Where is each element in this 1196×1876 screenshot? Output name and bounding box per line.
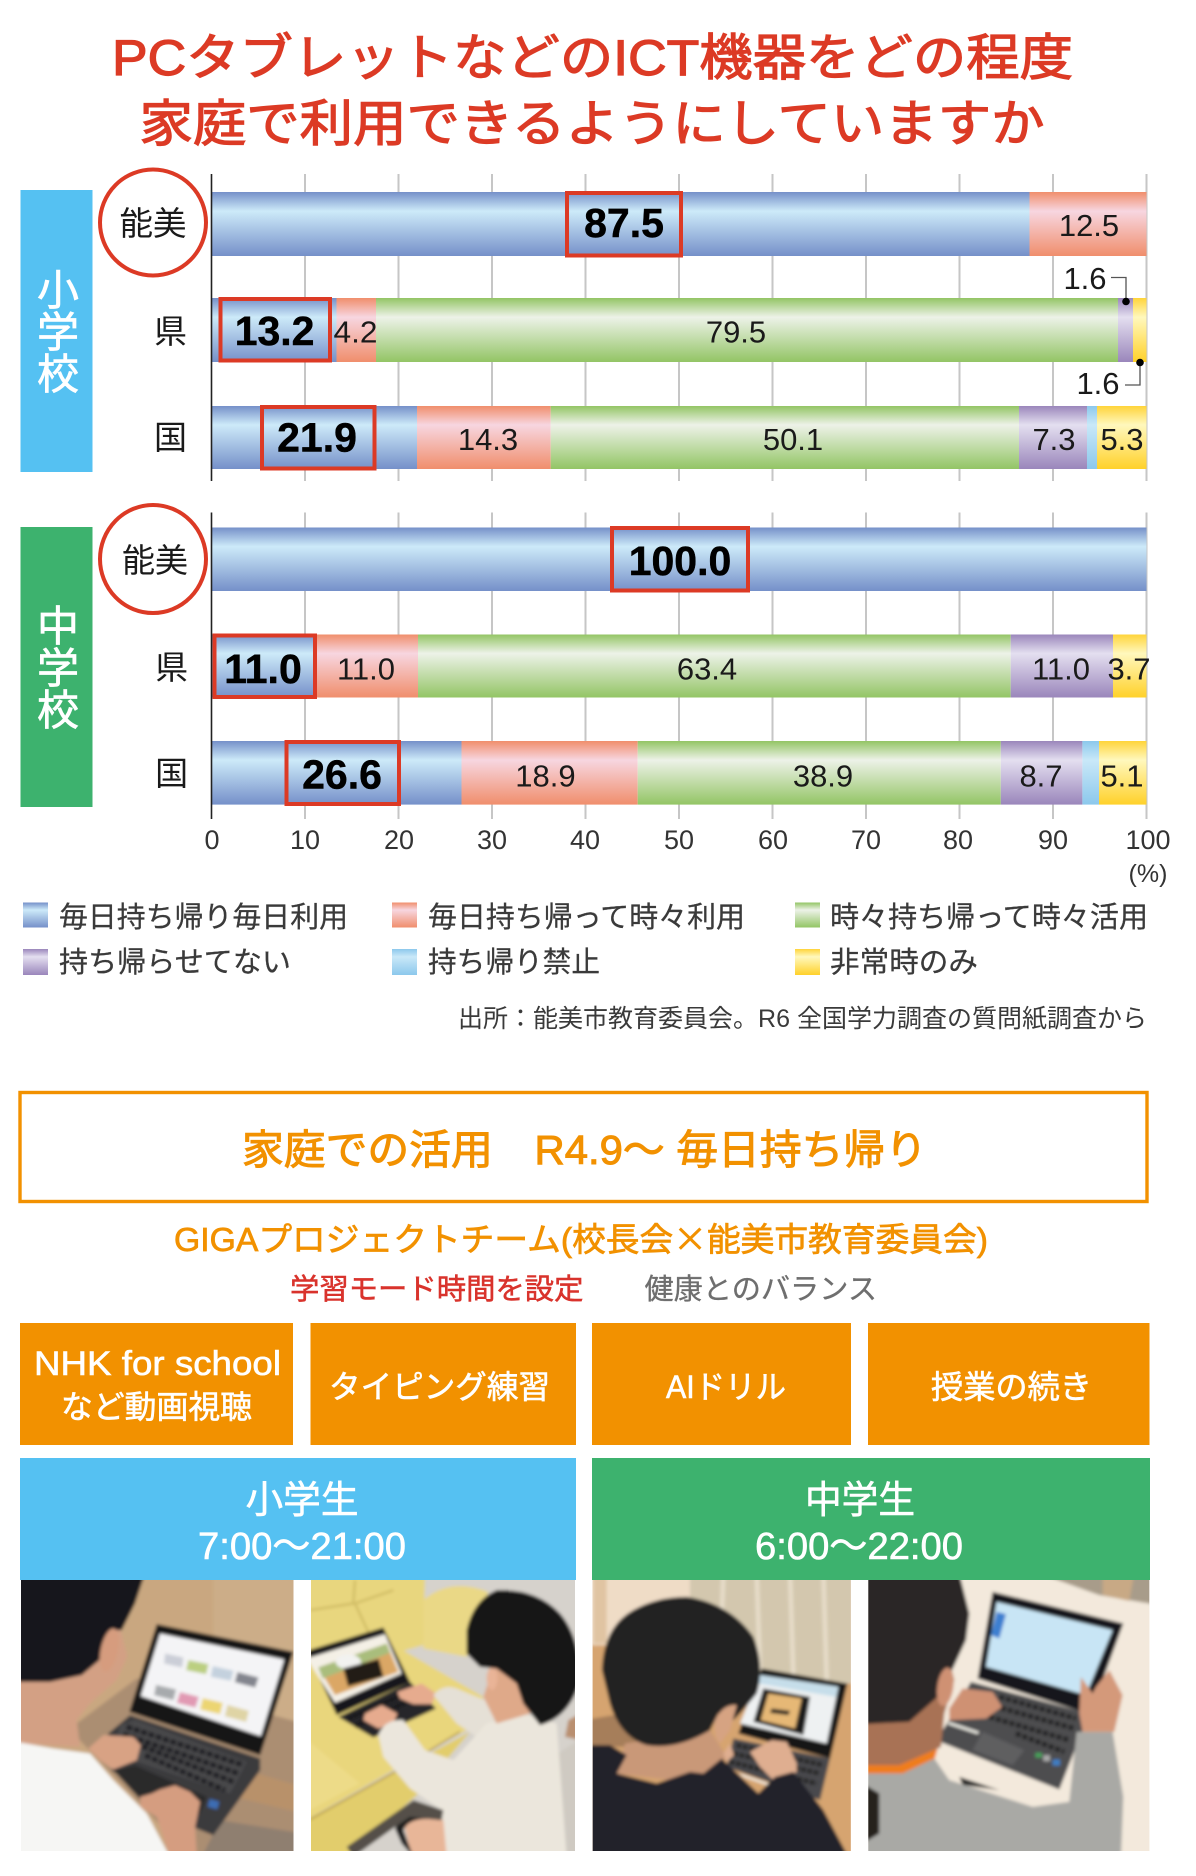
axis line junior high xyxy=(210,512,212,819)
legend: 毎日持ち帰って時々利用 xyxy=(428,901,745,934)
row: national junior high: 26.6 xyxy=(302,752,382,798)
row: Nomi junior high xyxy=(100,505,1146,613)
row: national elementary: 50.1 xyxy=(763,422,823,457)
row: national elementary: 7.3 xyxy=(1032,422,1076,457)
row: prefecture elementary: 4.2 xyxy=(334,314,378,350)
row: prefecture elementary: 13.2 xyxy=(235,308,315,354)
row: prefecture junior high: 11.0 xyxy=(337,652,395,686)
axis labels xyxy=(204,825,1171,888)
note: learning mode: 学習モード時間を設定 xyxy=(290,1273,584,1306)
row: Nomi elementary: 能美 xyxy=(120,205,186,242)
axis labels: 20 xyxy=(384,825,414,855)
row: prefecture junior high xyxy=(155,634,1151,698)
axis labels: 60 xyxy=(758,825,788,855)
tile: AI drill xyxy=(592,1323,851,1445)
title: 家庭で利用できるようにしていますか xyxy=(140,96,1044,152)
row: national elementary: 14.3 xyxy=(458,422,518,457)
panel: junior high hours: 中学生 xyxy=(805,1480,915,1522)
row: national junior high: 5.1 xyxy=(1100,758,1144,794)
row: national junior high: 38.9 xyxy=(793,758,853,794)
panel: elementary hours: 小学生 xyxy=(246,1480,358,1522)
tile: typing xyxy=(310,1323,576,1445)
subheading: GIGA project team: GIGAプロジェクトチーム(校長会 ×能美市教育委員会) xyxy=(174,1213,988,1261)
photo: girl at laptop on wooden table xyxy=(21,1580,294,1851)
label: junior high: 校 xyxy=(37,687,79,734)
photo: student in gray sweater xyxy=(868,1580,1150,1851)
row: prefecture elementary: 79.5 xyxy=(706,314,766,350)
row: prefecture elementary: 1.6 xyxy=(1076,366,1120,401)
row: national junior high xyxy=(155,741,1147,805)
label: elementary school: 校 xyxy=(37,351,79,398)
row: prefecture junior high: 63.4 xyxy=(677,652,737,686)
axis labels: 40 xyxy=(570,825,600,855)
row: prefecture elementary: 県 xyxy=(154,313,187,350)
note: health balance: 健康とのバランス xyxy=(644,1273,877,1306)
axis labels: 10 xyxy=(290,825,320,855)
panel: elementary school chart xyxy=(20,170,1146,481)
row: prefecture junior high: 11.0 xyxy=(1032,652,1090,686)
photo: girl with ponytail on yellow sofa xyxy=(311,1580,575,1851)
row: prefecture junior high: 県 xyxy=(155,649,188,686)
title: PCタブレットなどのICT機器をどの程度 xyxy=(112,30,1073,86)
legend: 持ち帰らせてない xyxy=(59,946,291,979)
axis labels: 90 xyxy=(1038,825,1068,855)
axis line elementary xyxy=(210,174,212,481)
tile: continue class: 授業の続き xyxy=(931,1369,1092,1405)
row: Nomi junior high: 能美 xyxy=(122,542,188,579)
row: Nomi elementary xyxy=(100,170,1146,276)
axis labels: (%) xyxy=(1129,860,1167,888)
panel: junior high hours: 6:00～22:00 xyxy=(755,1526,963,1568)
panel: elementary hours xyxy=(20,1458,576,1580)
row: prefecture junior high: 3.7 xyxy=(1107,652,1151,686)
photo: boy in black hoodie xyxy=(592,1580,851,1851)
tile: NHK for school: NHK for school xyxy=(34,1345,281,1383)
label: junior high: 学 xyxy=(37,645,79,692)
gridlines: elementary xyxy=(305,174,1146,481)
row: Nomi elementary: 87.5 xyxy=(584,200,664,246)
heading box: home use xyxy=(20,1092,1147,1202)
legend: 毎日持ち帰り毎日利用 xyxy=(59,901,348,934)
legend xyxy=(23,901,1148,979)
tile: NHK for school: など動画視聴 xyxy=(61,1389,252,1425)
row: national junior high: 国 xyxy=(155,755,188,792)
row: national junior high: 18.9 xyxy=(515,758,576,794)
panel: junior high chart xyxy=(20,505,1171,888)
row: prefecture elementary: 1.6 xyxy=(1063,261,1107,296)
row: national elementary xyxy=(154,406,1146,469)
legend: 持ち帰り禁止 xyxy=(428,946,600,979)
tile: typing: タイピング練習 xyxy=(329,1369,550,1405)
row: Nomi elementary: 12.5 xyxy=(1059,208,1119,243)
row: prefecture elementary xyxy=(154,261,1146,401)
row: national junior high: 8.7 xyxy=(1019,758,1063,794)
tile: NHK for school xyxy=(20,1323,293,1445)
axis labels: 80 xyxy=(943,825,973,855)
label: elementary school xyxy=(20,190,92,472)
legend: 時々持ち帰って時々活用 xyxy=(830,901,1148,934)
row: prefecture junior high: 11.0 xyxy=(224,646,302,692)
row: national elementary: 5.3 xyxy=(1100,422,1144,457)
axis labels: 100 xyxy=(1125,825,1171,855)
panel: junior high hours xyxy=(592,1458,1150,1580)
gridlines: junior high xyxy=(305,512,1146,819)
label: junior high xyxy=(20,527,92,807)
row: Nomi junior high: 100.0 xyxy=(629,538,731,584)
axis labels: 70 xyxy=(851,825,881,855)
axis labels: 0 xyxy=(204,825,220,855)
row: national elementary: 21.9 xyxy=(277,414,357,460)
legend: 非常時のみ xyxy=(830,946,978,979)
panel: elementary hours: 7:00～21:00 xyxy=(198,1526,406,1568)
label: elementary school: 小 xyxy=(37,267,79,314)
source note: 出所：能美市教育委員会。R6 全国学力調査の質問紙調査から xyxy=(458,1005,1147,1033)
title xyxy=(112,30,1073,152)
label: junior high: 中 xyxy=(37,603,79,650)
label: elementary school: 学 xyxy=(37,309,79,356)
tile: AI drill: AIドリル xyxy=(666,1369,786,1405)
tile: continue class xyxy=(868,1323,1150,1445)
row: national elementary: 国 xyxy=(154,419,187,456)
heading box: home use: 家庭での活用 R4.9～ 毎日持ち帰り xyxy=(242,1127,927,1173)
axis labels: 50 xyxy=(664,825,694,855)
axis labels: 30 xyxy=(477,825,507,855)
